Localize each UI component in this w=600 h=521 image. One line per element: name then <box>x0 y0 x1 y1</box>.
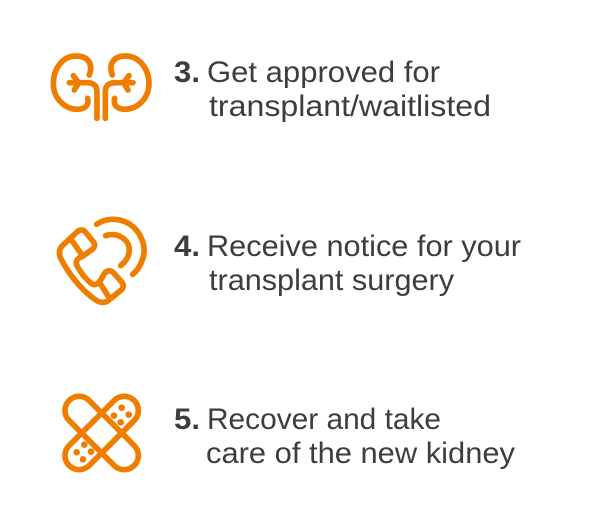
heading: step 4 text: Receive notice for your <box>207 230 521 263</box>
heading: step 4 text: transplant surgery <box>209 264 454 297</box>
heading: step 5 text: care of the new kidney <box>206 437 515 470</box>
step 3 <box>53 56 491 123</box>
icon: crossed bandages <box>59 390 144 476</box>
icon: kidneys <box>53 56 149 118</box>
step 5 <box>59 390 515 476</box>
heading: step 4 text <box>174 230 521 297</box>
heading: step 3 text: Get approved for <box>207 56 440 89</box>
heading: step 3 text: 3. <box>174 56 200 89</box>
heading: step 3 text: transplant/waitlisted <box>209 90 491 123</box>
heading: step 5 text: 5. <box>174 403 200 436</box>
heading: step 5 text <box>174 403 515 470</box>
step 4 <box>60 219 521 302</box>
heading: step 5 text: Recover and take <box>207 403 441 436</box>
heading: step 3 text <box>174 56 491 123</box>
icon: phone with signal arcs <box>60 219 144 302</box>
heading: step 4 text: 4. <box>174 230 200 263</box>
